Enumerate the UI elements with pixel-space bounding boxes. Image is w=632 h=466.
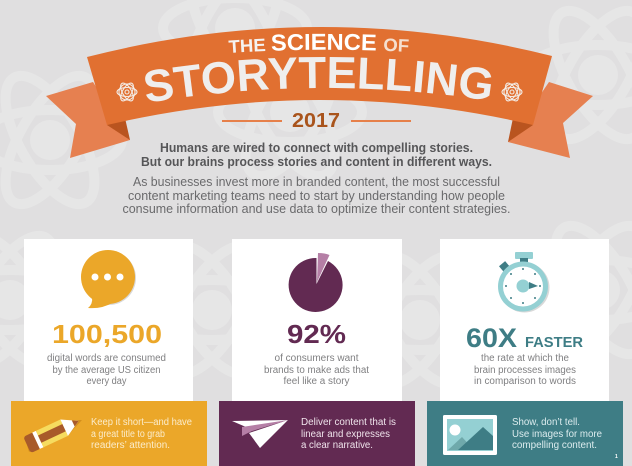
stat description: the rate at which the <box>481 353 569 364</box>
icon: pencil <box>23 413 82 453</box>
icon: speech bubble <box>81 250 136 308</box>
title small line: THE SCIENCE OF <box>228 34 409 53</box>
tip text: Show, don’t tell. <box>512 417 580 428</box>
page number: 1 <box>615 454 618 460</box>
stat description: of consumers want <box>274 353 359 364</box>
intro paragraph: As businesses invest more in branded content, the most successful <box>133 174 500 189</box>
stat description: digital words are consumed <box>47 353 166 364</box>
intro headline: But our brains process stories and content in different ways. <box>141 155 492 169</box>
right fold <box>508 118 533 142</box>
right flower icon <box>502 81 522 103</box>
intro headline: Humans are wired to connect with compelling stories. <box>160 141 473 155</box>
panel: speed: FASTER <box>525 334 583 351</box>
tip text: a clear narrative. <box>301 440 373 451</box>
left flower icon <box>117 81 137 103</box>
stat description: brands to make ads that <box>264 365 369 376</box>
left fold <box>107 118 130 140</box>
stat description <box>474 353 576 387</box>
icon: paper plane <box>232 420 288 448</box>
stat description <box>264 353 369 387</box>
tip text <box>301 417 396 451</box>
stat description: by the average US citizen <box>52 365 160 376</box>
tip text: compelling content. <box>512 440 597 451</box>
icon: pie chart <box>289 253 343 312</box>
icon: image frame <box>443 415 497 455</box>
tip text: readers’ attention. <box>91 440 170 451</box>
ribbon banner <box>46 27 593 158</box>
tip text: linear and expresses <box>301 429 390 440</box>
panel: words <box>24 239 193 401</box>
tip text: a great title to grab <box>91 429 165 440</box>
tip text <box>512 417 602 451</box>
tip text: Keep it short—and have <box>91 417 192 428</box>
tip text: Use images for more <box>512 429 602 440</box>
stat 60X faster: 60X <box>466 323 517 353</box>
intro paragraph: content marketing teams need to start by understanding how people <box>128 188 505 203</box>
year with rules: 2017 <box>292 110 340 132</box>
title big line: STORYTELLING <box>145 57 492 102</box>
tip text: Deliver content that is <box>301 417 396 428</box>
right ribbon tail <box>508 82 593 158</box>
panel: consumers <box>232 239 402 401</box>
tip text <box>91 417 192 451</box>
stat description: feel like a story <box>284 376 350 387</box>
intro paragraph: consume information and use data to optimize their content strategies. <box>122 201 510 216</box>
tip: keep it short <box>11 401 207 466</box>
stat description: every day <box>86 376 126 387</box>
intro headline <box>141 141 492 169</box>
banner body <box>87 27 552 125</box>
stat description <box>47 353 166 387</box>
stat 100,500: 100,500 <box>52 319 162 349</box>
tip: deliver content <box>219 401 415 466</box>
stat 92%: 92% <box>287 319 346 349</box>
panel: speed <box>440 239 609 401</box>
tip: show don't tell <box>427 401 623 466</box>
stat description: brain processes images <box>474 365 576 376</box>
left ribbon tail <box>46 82 130 158</box>
intro paragraph <box>122 174 510 216</box>
stat description: in comparison to words <box>474 376 576 387</box>
icon: stopwatch <box>498 252 550 312</box>
